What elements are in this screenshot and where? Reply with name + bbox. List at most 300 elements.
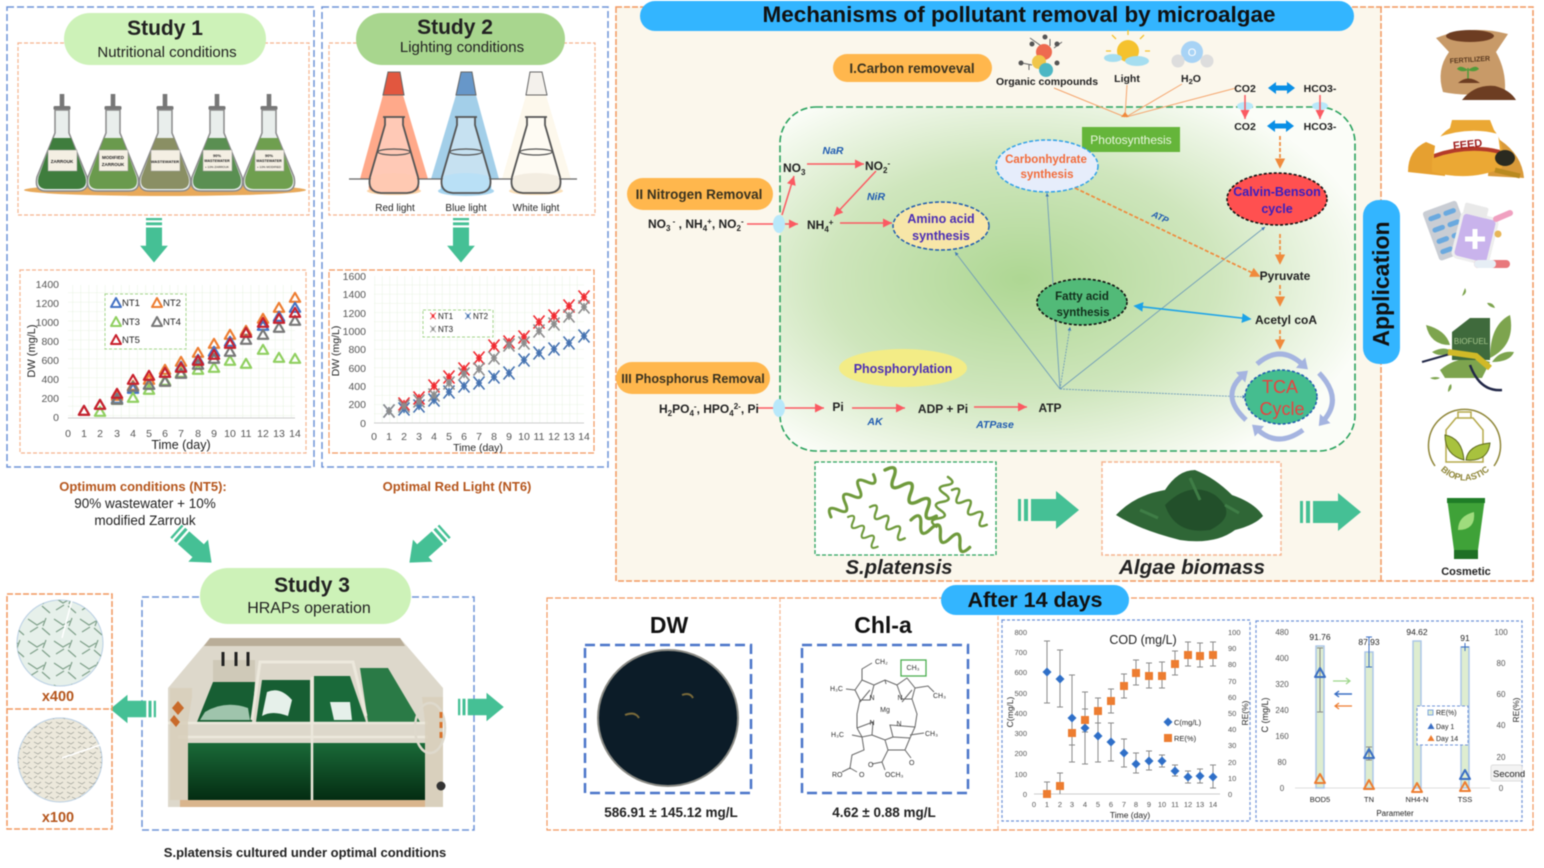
chart: study 2 dry weight (329, 270, 594, 454)
heading: study 3: HRAPs operation (247, 600, 371, 617)
text: nitrogen inputs: - (670, 217, 676, 226)
chart: removal efficiency by parameter: 160 (1275, 732, 1289, 741)
chart: study 2 dry weight: 1 (386, 431, 392, 443)
icon: light (1104, 30, 1150, 85)
image: x100 micrograph (18, 718, 102, 802)
chart: removal efficiency by parameter: 80 (1497, 659, 1506, 668)
chart: COD: 7 (1122, 800, 1126, 809)
flasks: nutritional media: + 10% ZARROUK (205, 165, 229, 169)
TCA cycle: Cycle (1259, 399, 1305, 419)
chart: removal efficiency by parameter: 320 (1275, 680, 1289, 689)
chart: study 2 dry weight: 7 (476, 431, 482, 443)
chart: study 2 dry weight: 14 (578, 431, 590, 443)
text: nitrogen inputs: + (707, 217, 712, 226)
chart: COD: 200 (1014, 749, 1027, 758)
nitrogen pathway (747, 145, 892, 234)
chart: study 2 dry weight: 400 (348, 381, 366, 393)
nitrogen pathway: 2 (883, 166, 888, 175)
chart: study 2 dry weight: 0 (360, 418, 366, 430)
chart: COD: 2 (1058, 800, 1062, 809)
icon: light: Light (1114, 73, 1140, 85)
arrow: to application (1300, 493, 1361, 531)
ellipse: Calvin-Benson cycle (1227, 173, 1327, 225)
chart: removal efficiency by parameter: 400 (1275, 654, 1289, 663)
chart: study 2 dry weight: 200 (348, 399, 366, 411)
panel: mechanisms (616, 1, 1533, 581)
chart: removal efficiency by parameter: 0 (1499, 784, 1504, 793)
chart: study 1 dry weight: 10 (224, 428, 236, 440)
text: phosphorus inputs: , HPO (697, 402, 729, 416)
chart: study 1 dry weight: 12 (257, 428, 269, 440)
arrow: fatty acid to acetyl coA (1135, 306, 1250, 319)
chart: study 1 dry weight: 8 (195, 428, 201, 440)
label: application (1363, 200, 1400, 364)
chart: COD: RE(%) (1174, 734, 1197, 743)
chart: COD: 14 (1209, 800, 1217, 809)
chart: removal efficiency by parameter: C (mg/L) (1260, 697, 1270, 733)
chart: study 1 dry weight: 2 (97, 428, 103, 440)
tooltip: second: Second (1493, 769, 1525, 780)
chart: removal efficiency by parameter: 94.62 (1406, 627, 1428, 637)
chart: study 1 dry weight: 1 (81, 428, 87, 440)
chart: study 1 dry weight: 13 (273, 428, 285, 440)
chart: COD: 30 (1228, 741, 1236, 750)
membrane pores (773, 102, 1328, 417)
text: phosphorus inputs: 4 (689, 409, 694, 418)
icon: cosmetic (1441, 498, 1491, 578)
carbon species exchange: CO2 (1234, 121, 1256, 133)
chart: COD: 20 (1228, 758, 1236, 767)
banner: after 14 days (941, 585, 1129, 615)
text: optimum conditions NT5: Optimum conditions (NT5): (59, 479, 227, 494)
label: nitrogen removal: II Nitrogen Removal (636, 187, 762, 202)
ellipse: amino acid synthesis: synthesis (912, 229, 970, 243)
text: phosphorus inputs: PO (672, 402, 689, 416)
ellipse: Calvin-Benson cycle: cycle (1261, 202, 1293, 216)
flasks: nutritional media (24, 94, 306, 196)
result: chlorophyll-a (802, 612, 968, 820)
ellipse: phosphorylation: Phosphorylation (854, 362, 952, 376)
chart: study 2 dry weight: 600 (348, 363, 366, 375)
text: phosphorus inputs: 2- (734, 402, 741, 411)
image: S. platensis (815, 462, 996, 555)
ellipse: Calvin-Benson cycle: Calvin-Benson (1233, 185, 1321, 199)
arrow: carbohydrate to pyruvate (1075, 188, 1259, 276)
legend: study 2 chart: NT3 (438, 325, 454, 334)
icon: water: H (1181, 73, 1189, 85)
chart: COD: 500 (1014, 689, 1027, 698)
nitrogen pathway: NO (783, 161, 801, 175)
chart: COD: 11 (1171, 800, 1179, 809)
ellipse: fatty acid synthesis: Fatty acid (1055, 291, 1109, 303)
carbon species exchange (1234, 82, 1337, 133)
icon: organic compounds (996, 34, 1098, 88)
chart: removal efficiency by parameter: 480 (1275, 628, 1289, 637)
chart: COD: 5 (1096, 800, 1100, 809)
chart: COD: 9 (1147, 800, 1151, 809)
legend: parameter chart: RE(%) (1436, 710, 1457, 717)
text: phosphorus inputs: 4 (729, 409, 734, 418)
chart: study 1 dry weight: 1000 (36, 317, 59, 329)
banner: after 14 days: After 14 days (967, 588, 1103, 612)
chart: COD: 0 (1228, 790, 1232, 799)
chart: study 1 dry weight: Time (day) (151, 438, 211, 452)
chart: study 2 dry weight: 11 (534, 431, 545, 443)
phosphorus pathway: Pi (832, 400, 844, 414)
text: optimum conditions NT5: modified Zarrouk (94, 513, 196, 528)
chart: COD: 40 (1228, 725, 1236, 734)
result: chlorophyll-a: OCH₃ (885, 772, 904, 779)
panel: after 14 days (547, 585, 1533, 830)
icon: water: O (1188, 47, 1197, 59)
ellipse: amino acid synthesis (893, 202, 989, 250)
label: carbon removal (833, 54, 992, 82)
chart: removal efficiency by parameter: 100 (1494, 628, 1508, 637)
icon: fertilizer (1436, 30, 1516, 100)
nitrogen pathway: NiR (867, 191, 885, 203)
heading: study 1 (64, 13, 266, 65)
text: nitrogen inputs: 4 (703, 224, 708, 233)
result: chlorophyll-a: CH₂ (875, 659, 888, 666)
flasks: nutritional media: WASTEWATER (256, 159, 282, 163)
title banner (640, 1, 1354, 31)
heading: study 2 (356, 13, 565, 65)
label: phosphorus removal (616, 362, 770, 394)
text: optimal red light: Optimal Red Light (NT6) (383, 479, 531, 494)
text: phosphorus inputs: , Pi (741, 402, 759, 416)
label: application: Application (1368, 221, 1394, 347)
chart: COD: 300 (1014, 729, 1027, 738)
chart: removal efficiency by parameter: RE(%) (1511, 697, 1521, 723)
phosphorus pathway: ATPase (975, 419, 1014, 431)
carbon pathway labels (1255, 136, 1317, 348)
result: chlorophyll-a: CH₃ (907, 665, 920, 672)
chart: COD: COD (mg/L) (1109, 633, 1177, 647)
chart: study 1 dry weight: 400 (41, 374, 59, 386)
carbon species exchange: CO2 (1234, 83, 1256, 95)
result: chlorophyll-a: N (896, 721, 902, 728)
lighting illustration: Blue light (445, 203, 487, 214)
chart: study 2 dry weight: DW (mg/L) (330, 326, 342, 376)
ellipse: amino acid synthesis: Amino acid (907, 212, 975, 226)
icon: cosmetic: Cosmetic (1441, 566, 1491, 578)
panel: microscope views (7, 594, 112, 829)
carbon pathway labels: Pyruvate (1260, 269, 1311, 283)
chart: COD: 6 (1109, 800, 1113, 809)
result: chlorophyll-a: 4.62 ± 0.88 mg/L (832, 805, 936, 820)
chart: removal efficiency by parameter: TN (1364, 795, 1374, 804)
chart: removal efficiency by parameter: 80 (1278, 758, 1287, 767)
chart: study 1 dry weight: 200 (41, 393, 59, 405)
chart: study 1 dry weight: 4 (130, 428, 136, 440)
chart: removal efficiency by parameter: NH4-N (1406, 795, 1428, 804)
photo: raceway pond tank (168, 638, 446, 807)
text: nitrogen inputs: - (741, 217, 744, 226)
ATP energy lines (955, 193, 1265, 397)
chart: COD: 80 (1228, 660, 1236, 669)
chart: study 2 dry weight: 1600 (343, 271, 366, 283)
legend: study 1 chart: NT2 (163, 298, 181, 309)
nitrogen pathway: 3 (801, 168, 806, 177)
chart: study 2 dry weight: 2 (401, 431, 407, 443)
icon: animal feed (1408, 120, 1524, 178)
arrow: to biomass (1018, 491, 1079, 529)
chart: COD: 13 (1196, 800, 1204, 809)
chart: removal efficiency by parameter: Parameter (1376, 809, 1414, 818)
flasks: nutritional media: WASTEWATER (204, 159, 230, 163)
carbon pathway labels: Acetyl coA (1255, 313, 1317, 327)
icon: water: 2 (1189, 77, 1193, 86)
heading: study 2: Lighting conditions (400, 39, 524, 56)
legend: study 1 chart: NT1 (122, 298, 140, 309)
flasks: nutritional media: 90% (265, 153, 273, 158)
text: optimum conditions NT5: 90% wastewater + 10% (74, 496, 216, 511)
nitrogen pathway: 4 (824, 225, 829, 234)
chart: study 1 dry weight: 9 (211, 428, 217, 440)
chart: study 2 dry weight: 3 (416, 431, 422, 443)
chart: study 1 dry weight: 3 (114, 428, 120, 440)
text: phosphorus inputs: - (694, 402, 697, 411)
label: x400: x400 (42, 689, 74, 705)
result: chlorophyll-a: Mg (880, 707, 890, 714)
ellipse: carbohydrate synthesis (996, 140, 1098, 192)
label: phosphorus removal: III Phosphorus Removal (621, 372, 765, 386)
chart: COD: 0 (1023, 790, 1027, 799)
arrow: study 2 to chart (447, 218, 475, 263)
image: x400 micrograph (17, 600, 103, 686)
phosphorus pathway: AK (866, 416, 884, 428)
label: x100: x100 (42, 810, 74, 826)
result: chlorophyll-a: RO (832, 772, 843, 779)
legend: study 2 chart: NT2 (473, 312, 489, 321)
legend: parameter chart: Day 14 (1436, 736, 1458, 743)
result: chlorophyll-a: O (859, 772, 865, 779)
text: phosphorus inputs: 2 (668, 409, 673, 418)
flasks: nutritional media: MODIFIED (102, 155, 125, 160)
phosphorus pathway: ATP (1038, 401, 1062, 415)
chart: study 2 dry weight: 0 (371, 431, 377, 443)
chart: removal efficiency by parameter: 91 (1460, 633, 1470, 643)
legend: study 1 chart: NT3 (122, 317, 140, 328)
chart: COD: 1 (1045, 800, 1049, 809)
legend: parameter chart: Day 1 (1436, 724, 1454, 731)
icon: bioplastic (1427, 408, 1502, 482)
chart: study 2 dry weight: 1200 (343, 308, 366, 320)
arrow: from study 2 to study 3 (400, 520, 455, 574)
chart: study 1 dry weight: DW (mg/L) (26, 324, 38, 378)
chart: study 1 dry weight: 0 (65, 428, 71, 440)
ellipse: fatty acid synthesis (1037, 279, 1127, 325)
chart: study 1 dry weight: 11 (241, 428, 252, 440)
text: nitrogen inputs: , NO (712, 217, 736, 231)
nitrogen pathway: + (829, 218, 834, 227)
chart: study 2 dry weight: 6 (461, 431, 467, 443)
flasks: nutritional media: ZARROUK (102, 162, 125, 167)
icon: bioplastic: BIOPLASTIC (1440, 465, 1490, 482)
chart: study 1 dry weight: 800 (41, 336, 59, 348)
chart: study 1 dry weight: 7 (178, 428, 184, 440)
panel: study 3 (110, 568, 504, 830)
chart: removal efficiency by parameter: 91.76 (1309, 632, 1331, 642)
chart: study 1 dry weight: 1200 (36, 298, 59, 310)
chart: COD: 400 (1014, 709, 1027, 718)
ellipse: fatty acid synthesis: synthesis (1056, 307, 1110, 319)
chart: COD (1002, 620, 1250, 821)
chart: study 2 dry weight: 13 (563, 431, 575, 443)
tooltip: second (1491, 765, 1525, 781)
legend: study 1 chart: NT4 (163, 317, 181, 328)
chart: study 2 dry weight: 800 (348, 344, 366, 356)
result: chlorophyll-a: CH₃ (933, 693, 946, 700)
chart: COD: C(mg/L) (1174, 718, 1202, 727)
icon: water: O (1193, 73, 1201, 85)
chart: COD: 800 (1014, 628, 1027, 637)
TCA cycle: TCA (1262, 377, 1298, 397)
chart: study 2 dry weight: 8 (491, 431, 497, 443)
icon: water (1172, 41, 1214, 86)
icon: pharmaceutical (1422, 200, 1510, 265)
panel: study 2 (322, 7, 608, 467)
chart: removal efficiency by parameter: TSS (1458, 795, 1472, 804)
nitrogen pathway: NaR (822, 145, 844, 157)
result: chlorophyll-a: O (909, 760, 915, 767)
result: chlorophyll-a: Chl-a (854, 612, 912, 638)
result: chlorophyll-a: N (897, 695, 903, 702)
chart: COD: 8 (1134, 800, 1138, 809)
chart: removal efficiency by parameter (1256, 621, 1525, 821)
panel: study 1 (7, 7, 314, 467)
chart: study 2 dry weight: 4 (431, 431, 437, 443)
nitrogen pathway: - (887, 159, 890, 168)
text: nitrogen inputs: NO (648, 217, 666, 231)
caption: study 3: S.platensis cultured under optimal conditions (164, 845, 446, 860)
lighting illustration (349, 72, 577, 214)
heading: study 3 (200, 568, 411, 624)
chart: study 2 dry weight: 1000 (343, 326, 366, 338)
lighting illustration: White light (513, 203, 560, 214)
text: phosphorus inputs: H (659, 402, 668, 416)
chart: study 1 dry weight: 6 (162, 428, 168, 440)
chart: COD: C(mg/L) (1005, 696, 1015, 727)
heading: study 1: Nutritional conditions (97, 44, 237, 61)
icon: biofuel (1422, 288, 1514, 392)
result: dry weight: DW (650, 612, 688, 638)
chart: COD: 600 (1014, 668, 1027, 677)
inputs to photosynthesis (1054, 84, 1236, 117)
icon: organic compounds: Organic compounds (996, 76, 1098, 88)
result: chlorophyll-a: O (868, 762, 874, 769)
text: nitrogen inputs: 3 (666, 224, 671, 233)
arrow: study 1 to chart (140, 218, 168, 263)
flasks: nutritional media: + 10% MODIFIED (257, 165, 282, 169)
chart: study 2 dry weight: 5 (446, 431, 452, 443)
cell with metabolic pathways (747, 107, 1355, 451)
chart: COD: 100 (1014, 770, 1027, 779)
result: chlorophyll-a: N (869, 695, 875, 702)
heading: study 2: Study 2 (417, 16, 493, 39)
chart: study 1 dry weight (20, 270, 306, 453)
chart: study 1 dry weight: 5 (146, 428, 152, 440)
label: S. platensis: S.platensis (846, 557, 952, 579)
chart: COD: 10 (1158, 800, 1166, 809)
chart: COD: 12 (1184, 800, 1192, 809)
icon: fertilizer: FERTILIZER (1449, 56, 1490, 65)
chart: COD: 0 (1032, 800, 1036, 809)
title banner: Mechanisms of pollutant removal by microalgae (762, 2, 1276, 27)
text: nitrogen inputs: 2 (736, 224, 741, 233)
lighting illustration: Red light (375, 203, 415, 214)
result: dry weight (585, 612, 751, 820)
chart: COD: 100 (1228, 628, 1241, 637)
arrow: to microscope views (110, 695, 156, 723)
chart: COD: 50 (1228, 709, 1236, 718)
flasks: nutritional media: 90% (213, 153, 221, 158)
box: photosynthesis (1082, 127, 1180, 152)
carbon species exchange: HCO3- (1304, 83, 1337, 95)
ellipse: carbohydrate synthesis: synthesis (1020, 169, 1074, 181)
chart: study 2 dry weight: 1400 (343, 289, 366, 301)
arrow: from study 1 to study 3 (166, 520, 221, 574)
label: nitrogen removal (627, 178, 773, 210)
chart: removal efficiency by parameter: 20 (1497, 753, 1506, 762)
flasks: nutritional media: WASTEWATER (151, 159, 179, 164)
chart: study 2 dry weight: 9 (506, 431, 512, 443)
legend: study 1 chart: NT5 (122, 335, 140, 346)
arrow: to mechanisms (458, 693, 504, 721)
ellipse: carbohydrate synthesis: Carbonhydrate (1005, 154, 1087, 166)
result: chlorophyll-a: H₃C (830, 686, 843, 693)
chart: removal efficiency by parameter: BOD5 (1310, 795, 1330, 804)
chart: COD: 60 (1228, 693, 1236, 702)
chart: study 1 dry weight: 600 (41, 355, 59, 367)
TCA cycle (1232, 354, 1332, 439)
chart: study 2 dry weight: 10 (518, 431, 530, 443)
result: chlorophyll-a: CH₃ (925, 731, 938, 738)
chart: removal efficiency by parameter: 0 (1280, 784, 1285, 793)
chart: study 1 dry weight: 1400 (36, 279, 59, 291)
heading: study 3: Study 3 (274, 574, 350, 597)
carbon species exchange: HCO3- (1304, 121, 1337, 133)
phosphorus pathway (758, 400, 1062, 431)
chart: study 1 dry weight: 0 (53, 412, 59, 424)
label: carbon removal: I.Carbon removeval (849, 61, 975, 76)
chart: removal efficiency by parameter: 60 (1497, 690, 1506, 699)
chart: COD: 700 (1014, 648, 1027, 657)
chart: study 1 dry weight: 14 (289, 428, 301, 440)
box: photosynthesis: Photosynthesis (1090, 133, 1172, 147)
icon: animal feed: FEED (1452, 138, 1483, 153)
text: nitrogen inputs: , NH (675, 217, 703, 231)
chart: COD: Time (day) (1110, 810, 1150, 820)
chart: COD: 3 (1070, 800, 1074, 809)
chart: COD: 90 (1228, 644, 1236, 653)
result: chlorophyll-a: H₃C (831, 732, 844, 739)
phosphorus pathway: ADP + Pi (918, 402, 968, 416)
label: algae biomass: Algae biomass (1118, 557, 1265, 579)
ellipse: phosphorylation (839, 349, 967, 387)
chart: COD: 10 (1228, 774, 1236, 783)
chart: COD: 70 (1228, 677, 1236, 686)
legend: parameter chart (1417, 706, 1468, 745)
chart: study 2 dry weight: Time (day) (453, 442, 503, 454)
text: optimum conditions NT5 (59, 479, 227, 528)
result: dry weight: 586.91 ± 145.12 mg/L (604, 805, 738, 820)
legend: study 2 chart: NT1 (438, 312, 454, 321)
chart: COD: RE(%) (1240, 700, 1250, 726)
result: chlorophyll-a: N (869, 720, 875, 727)
chart: COD: 4 (1083, 800, 1087, 809)
icon: biofuel: BIOFUEL (1454, 337, 1489, 346)
